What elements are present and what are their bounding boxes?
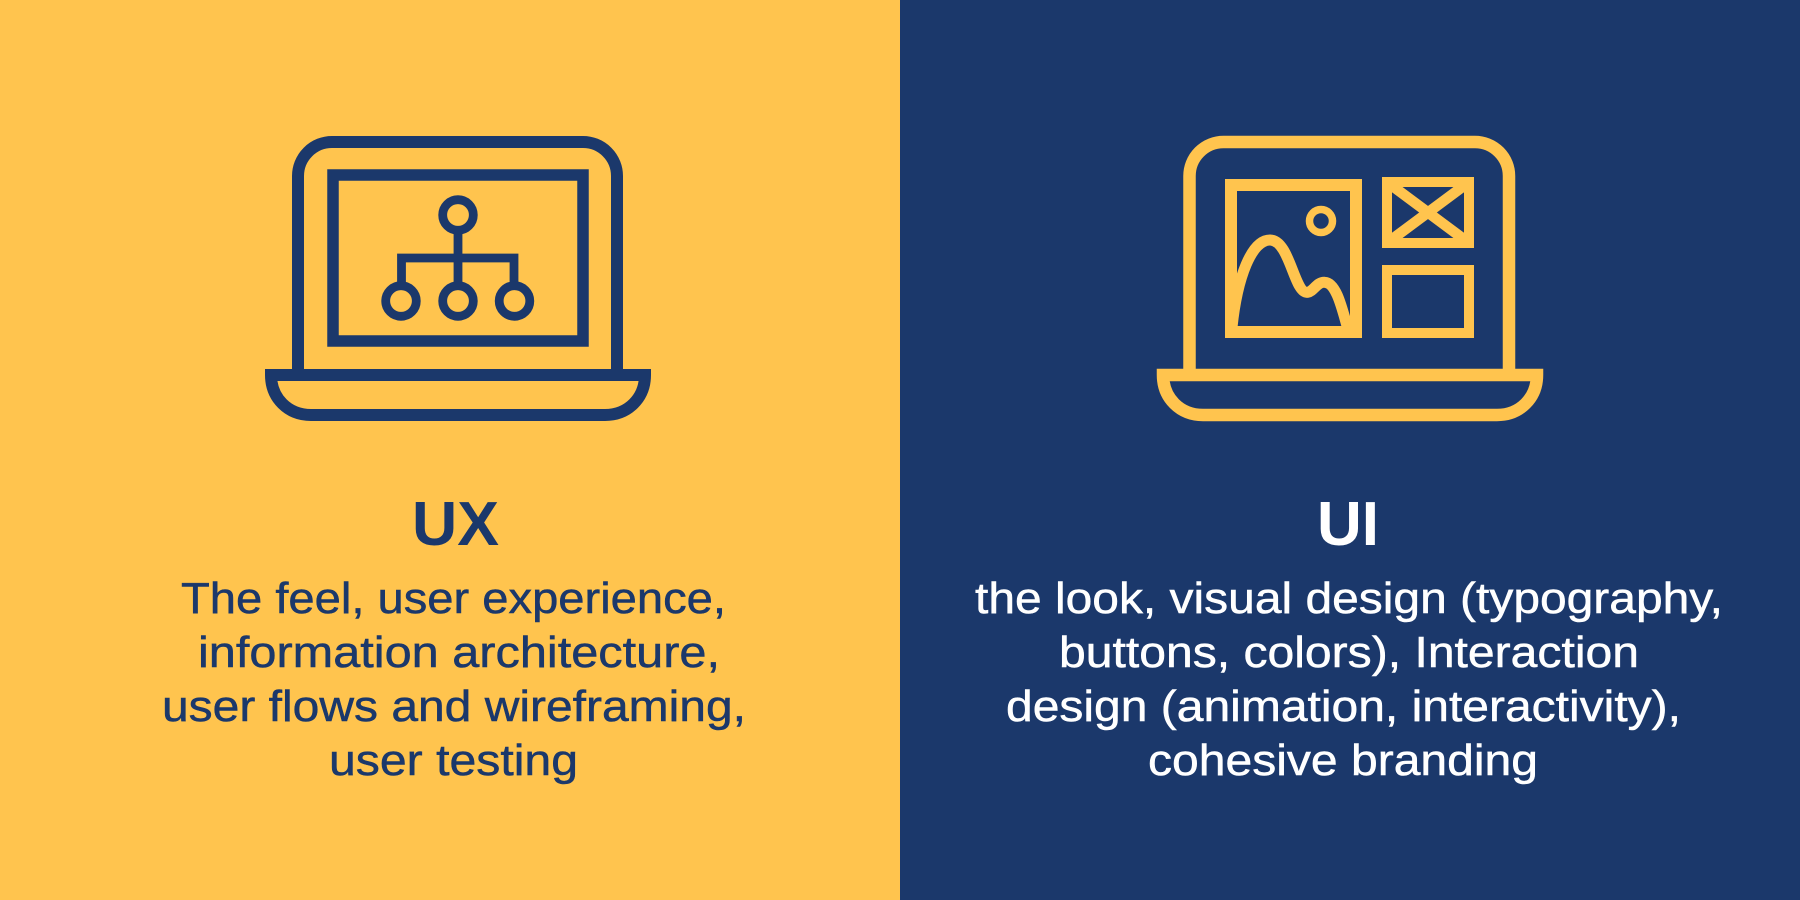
icon: laptop with sitemap xyxy=(271,142,645,415)
text block: UI description: cohesive branding xyxy=(1148,736,1538,785)
laptop lid xyxy=(298,142,617,375)
sitemap centre node xyxy=(443,286,473,316)
text block: UX description: information architecture, xyxy=(198,628,720,677)
heading: UI: UI xyxy=(1317,490,1379,559)
sitemap right node xyxy=(499,286,530,316)
empty wireframe box xyxy=(1387,270,1469,333)
image mountains xyxy=(1232,240,1348,329)
text block: UX description: user flows and wireframing, xyxy=(162,682,746,731)
UX panel background xyxy=(0,0,900,900)
laptop lid xyxy=(1190,142,1509,375)
image sun xyxy=(1310,210,1332,232)
sitemap connectors xyxy=(402,230,514,286)
laptop base xyxy=(271,375,645,415)
text block: UX description: user testing xyxy=(329,736,578,785)
heading: UX: UX xyxy=(412,490,499,559)
panel: UI xyxy=(900,0,1800,900)
UI panel background xyxy=(900,0,1800,900)
crossed wireframe box xyxy=(1387,182,1469,243)
text block: UI description xyxy=(975,574,1723,785)
image placeholder frame xyxy=(1231,185,1356,332)
panel: UX xyxy=(0,0,900,900)
icon: laptop with visual layout xyxy=(1163,142,1537,415)
text block: UI description: the look, visual design (typography, xyxy=(975,574,1723,623)
text block: UI description: design (animation, interactivity), xyxy=(1006,682,1681,731)
sitemap left node xyxy=(386,286,416,316)
laptop base xyxy=(1163,375,1537,415)
text block: UI description: buttons, colors), Interaction xyxy=(1059,628,1639,677)
screen frame xyxy=(333,175,583,341)
sitemap diagram xyxy=(386,200,530,316)
sitemap root node xyxy=(443,200,473,230)
text block: UX description xyxy=(162,574,746,785)
wireframe box cross xyxy=(1387,182,1469,243)
wireframe box frame xyxy=(1387,182,1469,243)
text block: UX description: The feel, user experience, xyxy=(181,574,726,623)
